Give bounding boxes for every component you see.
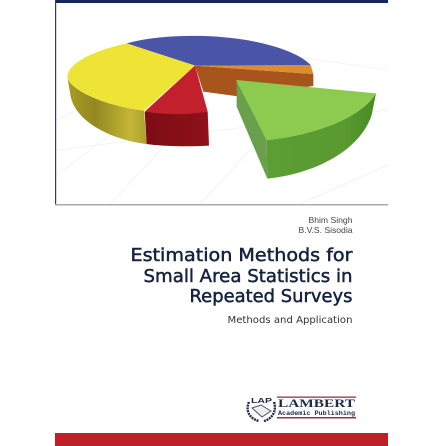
logo wordmark: LAMBERT xyxy=(278,398,355,410)
bottom bar xyxy=(55,433,388,446)
title: Small Area Statistics in xyxy=(144,266,352,287)
pie slice: yellow xyxy=(67,43,195,144)
logo wordmark: Academic Publishing xyxy=(278,410,355,418)
title: Repeated Surveys xyxy=(190,286,352,307)
pie slice: blue and orange xyxy=(127,36,313,97)
logo emblem: LAP xyxy=(251,396,272,405)
subtitle: Methods and Application xyxy=(228,315,352,326)
cover frame xyxy=(55,0,388,206)
authors: B.V.S. Sisodia xyxy=(298,226,353,235)
publisher logo xyxy=(248,396,356,421)
authors xyxy=(298,216,353,235)
pie slice: green, exploded xyxy=(236,80,376,179)
title: Estimation Methods for xyxy=(130,245,353,266)
authors: Bhim Singh xyxy=(308,216,352,225)
pie chart xyxy=(67,36,376,179)
pie slice: red xyxy=(145,66,209,146)
title xyxy=(130,245,353,307)
logo wordmark xyxy=(277,396,356,418)
